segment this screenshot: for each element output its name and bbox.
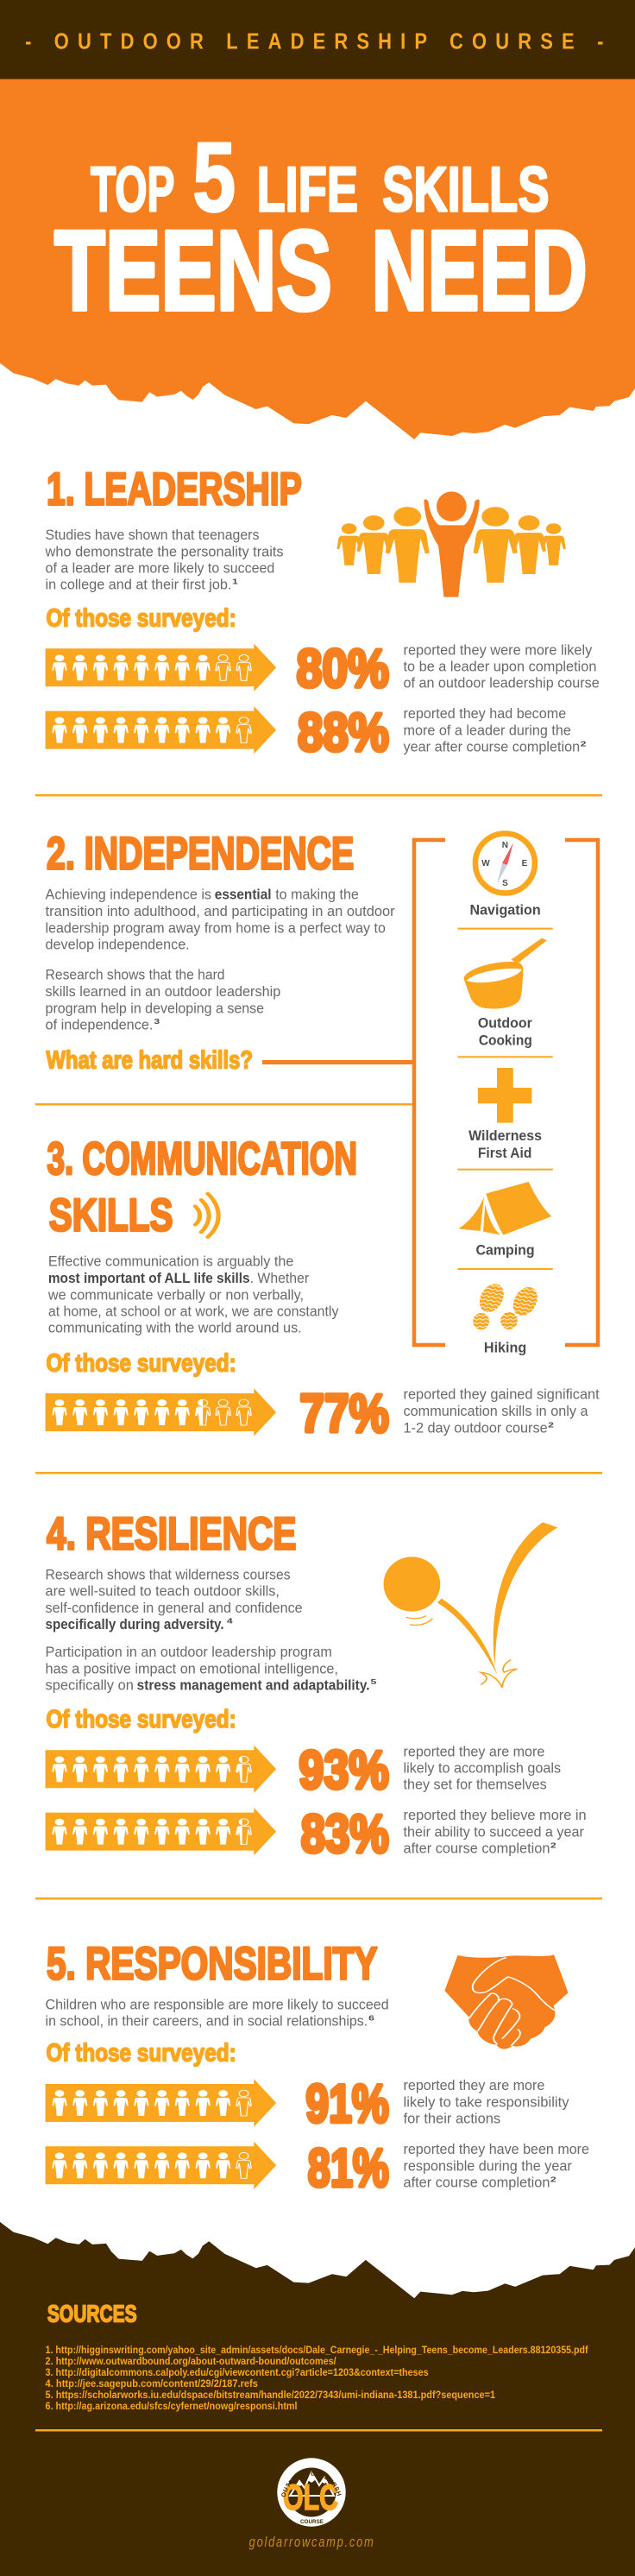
paragraph one: Research shows that wilderness courses	[46, 1567, 291, 1582]
stat: 93%: 93%	[299, 1740, 389, 1800]
body text: most important of ALL life skills	[48, 1271, 250, 1286]
stat: 88%: reported they had become	[404, 706, 566, 722]
paragraph one: transition into adulthood, and participating in an outdoor	[46, 904, 395, 919]
label: outdoor cooking: Cooking	[479, 1033, 532, 1049]
paragraph two: has a positive impact on emotional intelligence,	[46, 1661, 338, 1676]
stat: 93%: likely to accomplish goals	[404, 1761, 561, 1777]
title banner	[0, 79, 635, 439]
stat: 80%	[46, 639, 600, 699]
heading: 4. RESILIENCE	[47, 1507, 297, 1559]
stat: 81%: after course completion	[404, 2175, 550, 2190]
stat: 93%	[46, 1740, 561, 1800]
paragraph one: are well-suited to teach outdoor skills,	[46, 1584, 280, 1600]
course name: - OUTDOOR LEADERSHIP COURSE -	[25, 29, 603, 54]
survey heading: Of those surveyed:	[47, 2040, 236, 2067]
heading: 1. LEADERSHIP	[47, 463, 302, 515]
section 2: independence	[46, 827, 395, 1074]
intro text	[45, 527, 284, 593]
intro text: of a leader are more likely to succeed	[46, 561, 274, 577]
body text: we communicate verbally or non verbally,	[47, 1287, 304, 1303]
icon: group of people with leader	[336, 491, 566, 597]
paragraph two: of independence.	[46, 1017, 153, 1032]
stat: 93%: reported they are more	[404, 1744, 544, 1759]
stat: 77%	[46, 1384, 600, 1443]
source urls: 6. http://ag.arizona.edu/sfcs/cyfernet/nowg/responsi.html	[46, 2401, 298, 2412]
label: outdoor cooking: Outdoor	[478, 1016, 532, 1032]
body text: 6	[368, 2014, 374, 2023]
stat: 88%: 88%	[298, 703, 389, 763]
paragraph one: leadership program away from home is a perfect way to	[46, 920, 386, 936]
stat: 91%: likely to take responsibility	[404, 2094, 569, 2110]
paragraph one	[46, 887, 395, 952]
heading	[47, 1133, 357, 1241]
title line one	[91, 122, 550, 232]
paragraph two: 3	[154, 1018, 160, 1026]
intro text: 1	[232, 578, 238, 586]
survey heading: Of those surveyed:	[47, 605, 236, 632]
logo badge	[277, 2458, 346, 2527]
section 3: communication skills	[46, 1133, 600, 1443]
icon: tent	[458, 1182, 551, 1235]
paragraph two: program help in developing a sense	[46, 1001, 264, 1016]
skills list lower	[457, 1169, 553, 1356]
stat: 83%: 83%	[301, 1804, 389, 1865]
paragraph one: 4	[227, 1617, 233, 1626]
survey heading: Of those surveyed:	[47, 1350, 236, 1377]
body text: Children who are responsible are more likely to succeed	[46, 1997, 389, 2012]
logo badge: OUTDOOR LEADERSHIP	[281, 2471, 342, 2497]
paragraph two: skills learned in an outdoor leadership	[46, 984, 280, 1000]
paragraph one: develop independence.	[46, 937, 190, 952]
sources list	[46, 2301, 588, 2550]
paragraph one: self-confidence in general and confidence	[46, 1601, 303, 1616]
icon: handshake	[444, 1954, 569, 2049]
stat: 91%: for their actions	[404, 2111, 500, 2126]
stat: 77%: 1-2 day outdoor course	[404, 1420, 548, 1436]
icon: compass: S	[502, 879, 508, 888]
label: navigation: Navigation	[470, 902, 541, 918]
label: camping: Camping	[476, 1242, 535, 1258]
survey heading: Of those surveyed:	[47, 1706, 236, 1733]
body text: Effective communication is arguably the	[48, 1254, 293, 1270]
label: hiking: Hiking	[484, 1341, 526, 1356]
heading: 2. INDEPENDENCE	[47, 827, 354, 879]
stat: 93%: they set for themselves	[404, 1777, 547, 1793]
paragraph two: stress management and adaptability.	[137, 1677, 370, 1693]
stat: 91%: reported they are more	[404, 2078, 544, 2093]
stat: 91%	[46, 2074, 569, 2134]
body text: in school, in their careers, and in social relationships.	[46, 2014, 368, 2030]
stat: 80%: 80%	[297, 639, 389, 699]
paragraph one	[46, 1567, 303, 1632]
icon: first aid cross	[478, 1068, 531, 1123]
section 5: responsibility	[46, 1937, 589, 2198]
source urls: 3. http://digitalcommons.calpoly.edu/cgi/viewcontent.cgi?article=1203&context=theses	[46, 2367, 429, 2378]
source urls: 2. http://www.outwardbound.org/about-outward-bound/outcomes/	[46, 2356, 336, 2367]
paragraph two	[46, 968, 280, 1032]
paragraph two: Research shows that the hard	[46, 968, 225, 983]
stat: 88%	[46, 703, 587, 763]
section 1: leadership	[45, 463, 600, 763]
title line one: TOP	[91, 155, 174, 225]
label: wilderness first aid	[468, 1128, 542, 1161]
footer panel	[0, 2222, 635, 2576]
body text: communicating with the world around us.	[48, 1320, 302, 1335]
icon: bouncing ball	[384, 1522, 557, 1688]
hard skills question: What are hard skills?	[47, 1047, 253, 1074]
title line one: LIFE	[257, 155, 358, 225]
intro text: Studies have shown that teenagers	[46, 527, 259, 543]
icon: compass: N	[502, 841, 508, 850]
stat: 81%: 2	[550, 2175, 556, 2184]
paragraph two: specifically on	[46, 1677, 134, 1693]
stat: 83%: after course completion	[404, 1841, 550, 1857]
stat: 77%: 77%	[299, 1384, 389, 1443]
icon: compass: W	[481, 859, 490, 868]
intro text: in college and at their first job.	[46, 578, 231, 593]
section 4: resilience	[46, 1507, 587, 1865]
body text: . Whether	[250, 1271, 309, 1286]
title line two: TEENS	[54, 207, 332, 334]
stat: 83%: 2	[550, 1841, 556, 1850]
label: wilderness first aid: Wilderness	[468, 1128, 542, 1144]
stat: 83%	[46, 1804, 587, 1865]
source urls: 4. http://jee.sagepub.com/content/29/2/187.refs	[46, 2378, 258, 2390]
body text	[47, 1254, 339, 1335]
stat: 81%: 81%	[308, 2138, 389, 2198]
paragraph two: Participation in an outdoor leadership program	[46, 1645, 332, 1660]
intro text: who demonstrate the personality traits	[45, 544, 284, 559]
icon: compass: E	[522, 859, 528, 868]
label: outdoor cooking	[478, 1016, 532, 1049]
paragraph two	[46, 1645, 376, 1693]
header band	[0, 0, 635, 79]
paragraph one: essential	[215, 887, 271, 903]
panel: hard skills bracket	[414, 834, 598, 1356]
label: wilderness first aid: First Aid	[478, 1146, 531, 1161]
source urls	[46, 2345, 588, 2412]
icon: sound waves	[195, 1194, 218, 1237]
paragraph one: Achieving independence is	[46, 887, 211, 903]
body text	[46, 1997, 389, 2030]
paragraph two: 5	[371, 1678, 376, 1686]
sources heading: SOURCES	[47, 2301, 137, 2327]
icon: boot prints	[473, 1282, 541, 1329]
logo badge: OLC	[283, 2477, 338, 2517]
website: goldarrowcamp.com	[249, 2535, 374, 2550]
stat: 91%: 91%	[305, 2074, 389, 2134]
body text: at home, at school or at work, we are constantly	[48, 1304, 339, 1319]
icon: cooking pot	[463, 938, 547, 1009]
stat: 81%	[46, 2138, 589, 2198]
paragraph one: to making the	[275, 887, 359, 903]
paragraph one: specifically during adversity.	[46, 1617, 224, 1632]
icon: compass	[475, 834, 535, 893]
logo badge: COURSE	[300, 2519, 324, 2525]
title line one: 5	[192, 122, 236, 232]
heading: SKILLS	[49, 1189, 173, 1241]
skills list upper	[457, 902, 553, 1161]
connector line	[262, 1060, 414, 1064]
stat: 88%: 2	[581, 740, 587, 748]
stat: 77%: 2	[548, 1421, 554, 1430]
